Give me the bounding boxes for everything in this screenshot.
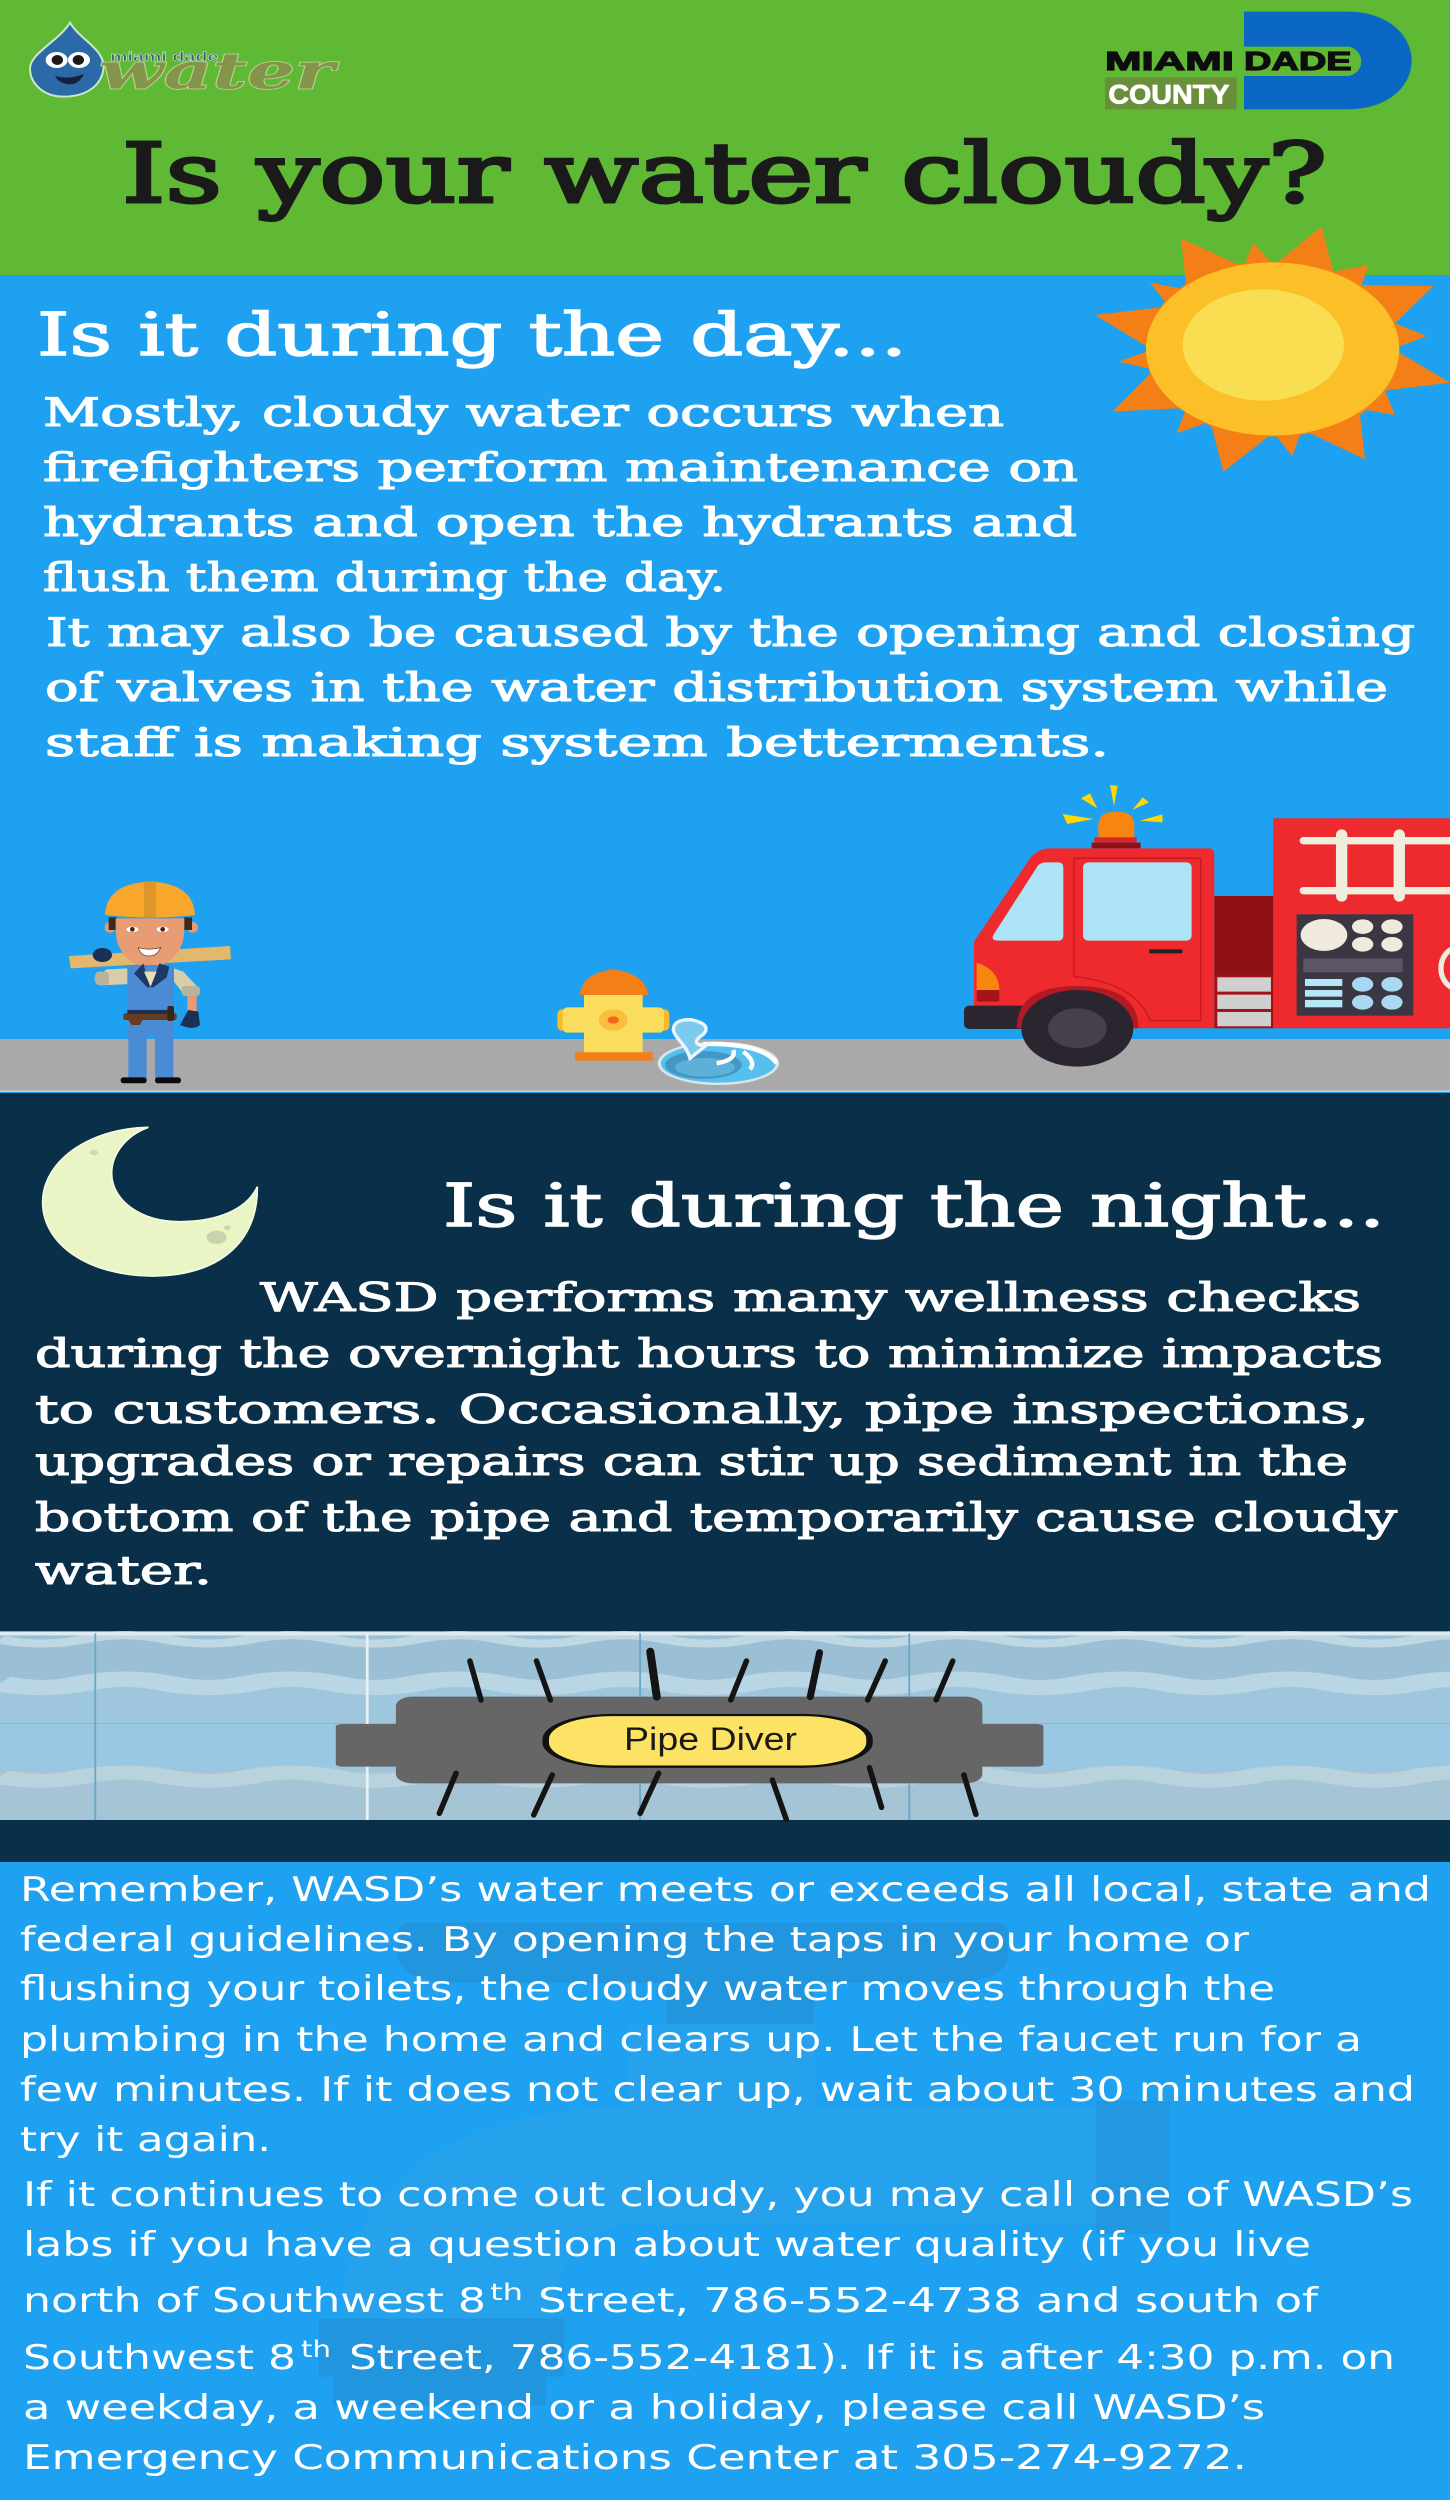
text block: who to call: Emergency Communications Center at 305-274-9272. bbox=[23, 2438, 1247, 2478]
road bbox=[0, 1039, 1450, 1092]
text block: night explanation: bottom of the pipe and temporarily cause cloudy bbox=[35, 1496, 1397, 1541]
text block: day explanation bbox=[43, 391, 1415, 766]
text block: guidance: few minutes. If it does not clear up, wait about 30 minutes and bbox=[20, 2070, 1415, 2110]
text block: day explanation: It may also be caused by the opening and closing bbox=[46, 611, 1415, 656]
logo: Miami Dade Water bbox=[30, 23, 340, 100]
logo: Miami Dade County: COUNTY bbox=[1108, 79, 1230, 109]
title: Is your water cloudy? bbox=[122, 127, 1327, 222]
text block: day explanation: firefighters perform maintenance on bbox=[43, 446, 1078, 491]
text block: night explanation: WASD performs many wellness checks bbox=[260, 1276, 1361, 1321]
text block: night explanation: water. bbox=[35, 1549, 212, 1594]
truck side steps bbox=[1217, 977, 1271, 1026]
icon: fire hydrant with water bbox=[557, 969, 779, 1085]
logo: Miami Dade Water: miami dade bbox=[110, 49, 218, 64]
logo: Miami Dade County bbox=[1105, 12, 1412, 109]
text block: night explanation bbox=[35, 1276, 1397, 1594]
panel: nighttime causes bbox=[0, 1093, 1450, 1863]
background watermark: faucet bbox=[319, 1923, 1170, 2406]
text block: night explanation: to customers. Occasionally, pipe inspections, bbox=[35, 1388, 1369, 1433]
panel: daytime causes bbox=[0, 275, 1450, 1040]
text block: day explanation: staff is making system betterments. bbox=[45, 721, 1109, 766]
label: Pipe Diver: Pipe Diver bbox=[624, 1721, 797, 1757]
icon: sun bbox=[1095, 227, 1450, 472]
text block: guidance bbox=[20, 1870, 1431, 2160]
text block: day explanation: Mostly, cloudy water occurs when bbox=[43, 391, 1004, 436]
icon: construction worker bbox=[69, 882, 231, 1083]
logo: Miami Dade Water: water bbox=[99, 41, 340, 100]
text block: day explanation: hydrants and open the hydrants and bbox=[43, 501, 1077, 546]
text block: night explanation: upgrades or repairs can stir up sediment in the bbox=[35, 1440, 1348, 1485]
text block: who to call: Street, 786-552-4738 and south of bbox=[538, 2281, 1319, 2321]
text block: day explanation: flush them during the day. bbox=[43, 556, 726, 601]
text block: who to call: th bbox=[301, 2337, 331, 2363]
text block: guidance: Remember, WASD’s water meets or exceeds all local, state and bbox=[20, 1870, 1431, 1910]
logo: Miami Dade County: DADE bbox=[1244, 46, 1352, 76]
text block: day explanation: of valves in the water distribution system while bbox=[45, 666, 1388, 711]
icon: fire truck bbox=[964, 785, 1450, 1067]
illustration: pipe with Pipe Diver bbox=[0, 1633, 1450, 1820]
text block: who to call: a weekday, a weekend or a holiday, please call WASD’s bbox=[23, 2388, 1265, 2428]
text block: who to call bbox=[23, 2175, 1413, 2478]
text block: who to call: th bbox=[490, 2280, 523, 2306]
panel: what to do bbox=[0, 1862, 1450, 2500]
text block: who to call: north of Southwest 8 bbox=[23, 2281, 486, 2321]
icon: crescent moon bbox=[43, 1127, 257, 1276]
text block: guidance: flushing your toilets, the cloudy water moves through the bbox=[20, 1969, 1275, 2009]
text block: guidance: federal guidelines. By opening the taps in your home or bbox=[20, 1920, 1249, 1960]
text block: who to call: Southwest 8 bbox=[23, 2338, 296, 2378]
heading: night: Is it during the night... bbox=[443, 1171, 1385, 1240]
text block: who to call: Street, 786-552-4181). If it is after 4:30 p.m. on bbox=[349, 2338, 1395, 2378]
text block: guidance: plumbing in the home and clears up. Let the faucet run for a bbox=[20, 2020, 1362, 2060]
text block: who to call: If it continues to come out cloudy, you may call one of WASD’s bbox=[23, 2175, 1413, 2215]
heading: day: Is it during the day... bbox=[37, 300, 907, 369]
text block: guidance: try it again. bbox=[20, 2120, 271, 2160]
text block: night explanation: during the overnight hours to minimize impacts bbox=[35, 1332, 1383, 1377]
text block: who to call: labs if you have a question about water quality (if you live bbox=[23, 2225, 1311, 2265]
panel: header bbox=[0, 0, 1450, 275]
logo: Miami Dade County: MIAMI bbox=[1105, 46, 1234, 76]
